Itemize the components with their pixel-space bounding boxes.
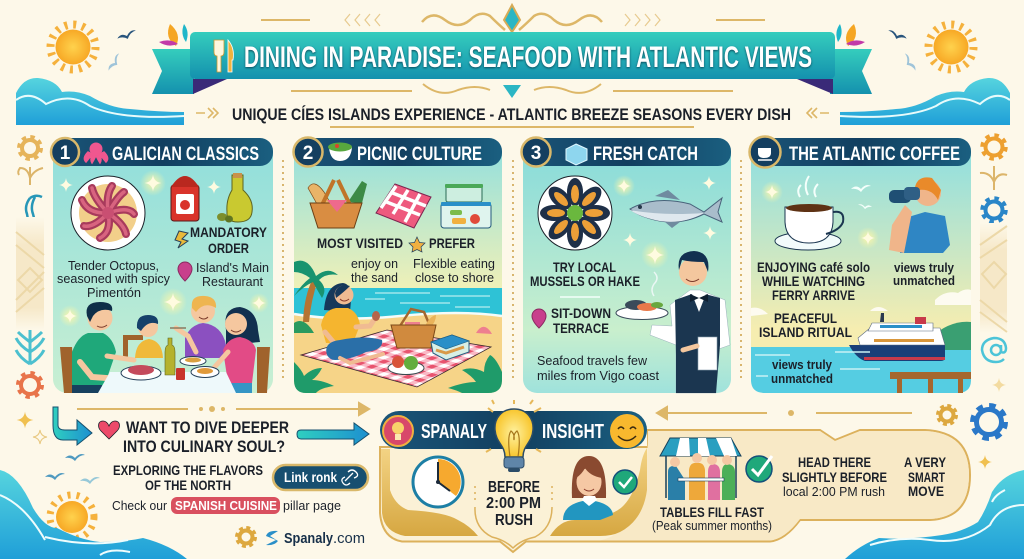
text: enjoying cafe solo: WHILE WATCHING — [762, 273, 865, 289]
brand logo: .com — [333, 530, 365, 547]
centre bracket — [475, 486, 552, 548]
text: head there: local 2:00 PM rush — [783, 484, 885, 499]
icon: spiral at sign — [982, 338, 1006, 362]
icon: heart — [99, 421, 119, 439]
icon: food containers — [441, 184, 491, 228]
text: peaceful island ritual: ISLAND RITUAL — [759, 324, 852, 340]
banner body — [190, 32, 835, 79]
text: dive deeper: WANT TO DIVE DEEPER — [126, 418, 289, 437]
panel background — [523, 140, 731, 393]
decorative chevrons left — [196, 108, 218, 118]
illustration: family dining — [60, 296, 270, 393]
text: tender octopus: Tender Octopus, — [68, 258, 159, 273]
heading: THE ATLANTIC COFFEE — [789, 144, 960, 165]
illustration: fruit plate — [388, 356, 424, 374]
text: smart move: MOVE — [908, 483, 944, 499]
panel: fresh catch — [522, 138, 731, 393]
sparkles — [59, 170, 269, 327]
icon: small gold gear — [939, 407, 955, 423]
text: enjoying cafe solo — [757, 259, 870, 303]
icon: octopus — [84, 142, 108, 163]
illustration: man with binoculars — [889, 177, 950, 253]
number badge: 3 — [531, 143, 541, 164]
left ribbon tail — [152, 49, 227, 94]
text: peaceful island ritual: PEACEFUL — [774, 310, 837, 326]
woman — [212, 307, 260, 393]
illustration: woman picnicking — [321, 283, 383, 363]
heading insight: INSIGHT — [542, 421, 604, 443]
heading: PICNIC CULTURE — [357, 144, 482, 165]
text: smart move: A VERY — [904, 454, 947, 470]
illustration: palm tree — [294, 261, 338, 333]
illustration: picnic blanket — [301, 330, 491, 387]
pillar page line: pillar page — [283, 498, 341, 513]
arrow: teal curved — [53, 407, 92, 445]
text: enjoying cafe solo: FERRY ARRIVE — [772, 287, 855, 303]
panel header — [750, 136, 971, 168]
icon: right wave — [840, 78, 1010, 125]
number badge with cup — [750, 136, 780, 168]
tan right section — [600, 431, 969, 540]
icon: smiley — [610, 414, 644, 448]
heading spanaly: SPANALY — [421, 421, 487, 443]
text: exploring the flavors — [113, 462, 263, 493]
text: views truly unmatched top: unmatched — [893, 273, 955, 288]
icon: large blue gear — [974, 407, 1004, 437]
text: peaceful island ritual — [759, 310, 852, 340]
text: main restaurant: Restaurant — [202, 274, 263, 289]
text: prefer: PREFER — [429, 235, 475, 251]
illustration: serving plate — [616, 300, 668, 320]
panel: the atlantic coffee — [750, 136, 971, 393]
text: tables fill fast — [652, 504, 772, 533]
icon: gold gear — [238, 529, 254, 545]
text: sit-down terrace: SIT-DOWN — [551, 305, 611, 321]
father — [72, 302, 134, 393]
icon: left gulls — [106, 30, 137, 73]
icon: mandatory bolt — [175, 231, 188, 248]
decorative chevrons right — [807, 108, 829, 118]
bottom right wave — [845, 470, 1024, 559]
icon: wicker basket — [308, 180, 367, 228]
arrow: gold connector right — [657, 407, 912, 419]
subtitle — [196, 105, 829, 124]
heading: GALICIAN CLASSICS — [112, 144, 259, 165]
illustration: hill and clouds — [751, 289, 971, 350]
text: enjoy on the sand — [351, 256, 398, 285]
text: try local — [530, 259, 640, 289]
bottom call to action — [53, 403, 369, 547]
panel background — [53, 140, 273, 393]
text: flexible eating: Flexible eating — [413, 256, 495, 271]
text: enjoying cafe solo: ENJOYING café solo — [757, 259, 870, 275]
text: tender octopus — [57, 258, 170, 300]
left side decorations — [16, 138, 44, 396]
sparkle — [992, 378, 1006, 392]
icon: checkered blanket — [376, 184, 431, 228]
arrow: teal straight — [297, 423, 369, 445]
panel background — [751, 140, 971, 393]
sparkles — [17, 412, 47, 444]
text: exploring the flavors: EXPLORING THE FLAVORS — [113, 462, 263, 478]
bottom left decoration: wave, gulls and sun — [0, 412, 187, 559]
text: views truly unmatched bottom: unmatched — [771, 371, 833, 386]
brand logo — [266, 530, 365, 547]
icon: orange gear — [984, 136, 1004, 158]
icon: sunset — [50, 495, 94, 539]
sparkles — [613, 175, 717, 269]
dotted dividers — [283, 160, 741, 382]
text: enjoy on the sand: enjoy on — [351, 256, 398, 271]
pattern panel — [980, 223, 1007, 333]
icon: right sun — [928, 24, 974, 70]
ornament: top flourish — [261, 5, 765, 32]
text: sit-down terrace: TERRACE — [553, 320, 609, 336]
icon: olive oil bottle — [217, 173, 252, 222]
icon: location pin — [178, 262, 192, 281]
text: tables fill fast: TABLES FILL FAST — [660, 504, 764, 520]
illustration: ferry — [849, 313, 945, 361]
icon: left wave — [16, 78, 184, 125]
panel background — [294, 140, 502, 393]
panel: spanaly insight — [380, 400, 970, 552]
text: dive deeper — [123, 418, 289, 456]
text: head there — [782, 454, 887, 499]
text: views truly unmatched top — [893, 260, 955, 288]
icon: blue gear — [984, 200, 1004, 220]
number badge: 2 — [303, 143, 313, 164]
right side decorations — [980, 136, 1007, 392]
text: flexible eating: close to shore — [415, 270, 494, 285]
panel header — [522, 138, 731, 166]
illustration: dock — [890, 372, 971, 393]
text: views truly unmatched top: views truly — [894, 260, 955, 275]
icon: orange gear lower — [19, 374, 41, 396]
icon: ice cube — [566, 144, 587, 165]
sprout flourish — [18, 167, 43, 185]
text: head there: HEAD THERE — [798, 454, 871, 470]
text: smart move — [904, 454, 947, 499]
link pill — [273, 465, 368, 490]
illustration: cafe table under awning — [660, 438, 741, 500]
bottom right decoration: gears, sparkle and wave — [845, 407, 1024, 559]
illustration: picnic basket — [391, 309, 436, 348]
text: views truly unmatched bottom: views truly — [772, 357, 833, 372]
text: before 2pm rush — [486, 479, 541, 529]
text: exploring the flavors: OF THE NORTH — [145, 477, 231, 493]
text: mandatory order: ORDER — [208, 240, 249, 256]
gold swoosh right — [550, 448, 647, 536]
pattern panel — [16, 217, 44, 330]
insight header — [380, 411, 647, 449]
icon: badge lightbulb — [383, 416, 413, 446]
illustration: woman — [563, 456, 613, 520]
number badge — [522, 138, 550, 166]
heading: FRESH CATCH — [593, 144, 698, 165]
icon: big lightbulb — [486, 400, 541, 472]
subtitle text: UNIQUE CÍES ISLANDS EXPERIENCE - ATLANTIC BREEZE SEASONS EVERY DISH — [232, 105, 791, 124]
text: smart move: SMART — [908, 469, 945, 485]
text: before 2pm rush: BEFORE — [488, 479, 540, 496]
text: sit-down terrace — [551, 305, 611, 336]
text: main restaurant: Island's Main — [196, 260, 269, 275]
icon: green check large — [746, 456, 772, 482]
icon: star — [409, 237, 425, 252]
teal leaf — [16, 330, 44, 364]
icon: left sun — [50, 24, 96, 70]
top left decoration: sun, gulls and wave — [16, 24, 188, 125]
number badge: 1 — [60, 143, 71, 164]
shell — [476, 327, 492, 334]
icon: octopus plate — [71, 176, 145, 250]
icon: clock — [413, 457, 463, 507]
text: head there: SLIGHTLY BEFORE — [782, 469, 887, 485]
icon: left splash — [159, 24, 188, 46]
panel header — [294, 138, 502, 166]
text: tender octopus: seasoned with spicy — [57, 271, 170, 286]
number badge — [51, 138, 79, 166]
panel: picnic culture — [294, 138, 502, 393]
chairs — [60, 335, 270, 393]
icon: gold gear — [20, 138, 40, 158]
brand logo: Spanaly — [284, 530, 334, 547]
beach scene — [294, 288, 502, 393]
icon: location pin — [532, 309, 546, 328]
icon: hake fish — [630, 190, 722, 228]
bottom left wave — [0, 470, 187, 559]
icon: fork and knife — [214, 40, 233, 72]
leaves — [294, 355, 502, 393]
icon: green check — [613, 470, 637, 494]
illustration: lunchbox — [431, 335, 469, 360]
text: before 2pm rush: RUSH — [495, 512, 533, 529]
text: tables fill fast: (Peak summer months) — [652, 518, 772, 533]
gold swoosh left — [381, 449, 478, 536]
text: flexible eating — [413, 256, 495, 285]
sprout flourish — [980, 166, 1007, 190]
icon: gulls — [851, 185, 872, 209]
number badge — [294, 138, 322, 166]
text: try local: TRY LOCAL — [553, 259, 616, 275]
title banner — [152, 32, 872, 94]
text: seafood travels — [537, 353, 659, 383]
text: mandatory order: MANDATORY — [190, 224, 268, 240]
arrow: gold connector — [77, 403, 369, 415]
child — [135, 315, 163, 358]
plates and bottle — [121, 338, 219, 380]
sparkles — [761, 181, 879, 249]
icon: gulls — [45, 454, 100, 484]
pillar page line: Check our — [112, 498, 168, 513]
text: try local: MUSSELS OR HAKE — [530, 273, 640, 289]
icon: salad bowl — [328, 142, 352, 161]
text: mandatory order — [190, 224, 268, 256]
insight container outline — [380, 430, 970, 552]
text: seafood travels: miles from Vigo coast — [537, 368, 659, 383]
top right decoration: sun, gulls and wave — [836, 24, 1010, 125]
pillar page line — [112, 497, 341, 514]
blond man — [170, 296, 226, 358]
ornament: under-title flourish — [291, 84, 733, 98]
panel: galician classics — [51, 138, 273, 393]
icon: right splash — [836, 24, 865, 46]
text: tender octopus: Pimentón — [87, 285, 141, 300]
table — [98, 372, 236, 393]
illustration: waiter — [650, 251, 730, 393]
text: before 2pm rush: 2:00 PM — [486, 495, 541, 512]
sea — [751, 347, 971, 393]
icon: pimenton tin — [171, 176, 199, 221]
text: enjoy on the sand: the sand — [351, 270, 398, 285]
text: seafood travels: Seafood travels few — [537, 353, 648, 368]
right ribbon tail — [797, 49, 872, 94]
spanish cuisine badge: SPANISH CUISINE — [175, 498, 277, 513]
text: main restaurant — [196, 260, 269, 289]
link pill: Link ronk — [284, 469, 337, 485]
panel header — [51, 138, 273, 166]
icon: coffee cup — [775, 176, 843, 250]
text: dive deeper: INTO CULINARY SOUL? — [123, 437, 285, 456]
sparkle — [978, 455, 992, 469]
icon: right gulls — [887, 30, 918, 73]
text: most visited: MOST VISITED — [317, 235, 403, 251]
icon: mussels plate — [538, 176, 612, 250]
text: views truly unmatched bottom — [771, 357, 833, 386]
blue squiggle — [26, 196, 42, 226]
